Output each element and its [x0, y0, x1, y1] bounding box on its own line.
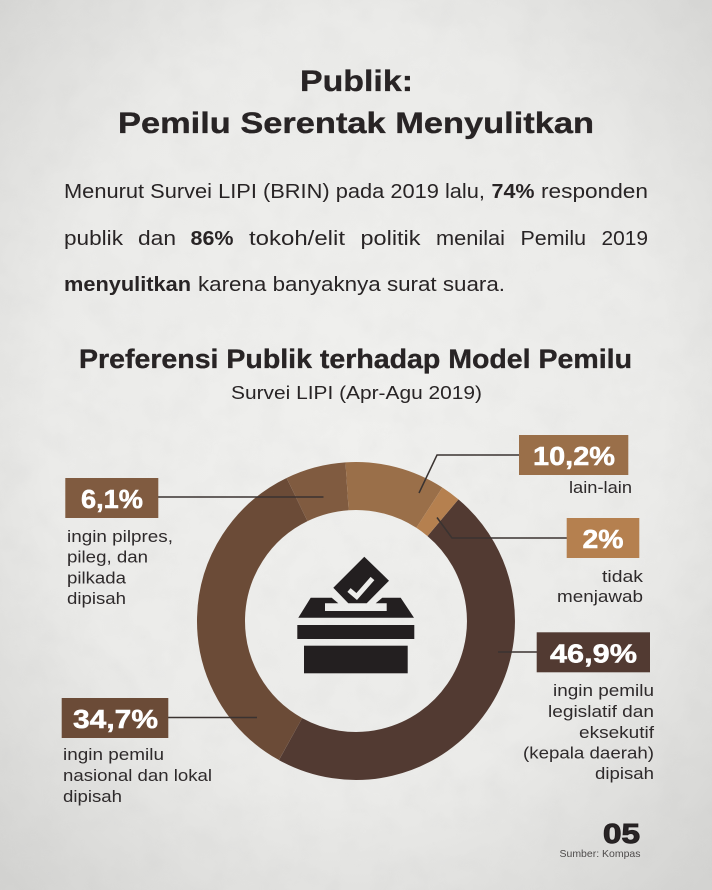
segment: 46,9% [291, 518, 491, 756]
callout: 6,1%: 6,1% [81, 484, 143, 514]
callout: 34,7%: dipisah [63, 788, 122, 806]
icon: ballot box [297, 557, 414, 673]
intro paragraph: politik [360, 228, 422, 250]
callout: 34,7%: nasional dan lokal [63, 767, 212, 785]
callout: 10,2% lain-lain: 10,2% [533, 441, 615, 471]
callout: 10,2% lain-lain: lain-lain [569, 479, 632, 497]
segment: 34,7% [221, 500, 297, 739]
title [118, 65, 594, 140]
callout: 46,9%: (kepala daerah) [523, 744, 654, 762]
callout: 46,9%: dipisah [595, 765, 654, 783]
title: Publik: [300, 65, 413, 98]
intro paragraph: Pemilu [520, 228, 586, 250]
intro paragraph: tokoh/elit [249, 228, 346, 250]
title: Pemilu Serentak Menyulitkan [118, 107, 594, 140]
callout: 2% tidak menjawab [437, 518, 644, 606]
callout: 10,2% lain-lain [419, 435, 632, 497]
callout: 46,9%: ingin pemilu [553, 682, 654, 700]
callout: 6,1%: pileg, dan [67, 548, 148, 566]
callout: 6,1%: pilkada [67, 570, 127, 588]
intro paragraph: 74% [492, 181, 535, 203]
segment: 10,2% [347, 486, 429, 508]
intro paragraph: publik [64, 228, 124, 250]
intro paragraph: menilai [436, 228, 505, 250]
callout: 46,9%: 46,9% [550, 638, 637, 668]
chart subheading: Survei LIPI (Apr-Agu 2019) [231, 382, 482, 403]
intro paragraph: 86% [190, 228, 234, 250]
callout: 6,1%: dipisah [67, 590, 126, 608]
callout: 34,7%: 34,7% [73, 704, 158, 734]
callout: 46,9% [498, 632, 654, 783]
intro paragraph: Menurut Survei LIPI (BRIN) pada 2019 lalu, [64, 181, 485, 203]
donut chart [221, 486, 491, 756]
page number: 05 [603, 818, 640, 849]
intro paragraph: 2019 [602, 228, 648, 250]
chart heading: Preferensi Publik terhadap Model Pemilu [79, 344, 632, 374]
intro paragraph: menyulitkan [64, 274, 191, 296]
callout: 2% tidak menjawab: 2% [582, 524, 624, 554]
callout: 46,9%: eksekutif [579, 724, 654, 742]
segment: 6,1% [297, 486, 347, 500]
intro paragraph: karena banyaknya surat suara. [198, 274, 505, 296]
intro paragraph: dan [138, 228, 176, 250]
callout: 46,9%: legislatif dan [548, 703, 654, 721]
callout: 34,7%: ingin pemilu [63, 746, 164, 764]
callout: 2% tidak menjawab: menjawab [557, 588, 643, 606]
intro paragraph [64, 181, 648, 296]
callout: 2% tidak menjawab: tidak [602, 568, 644, 586]
callout: 6,1% [65, 478, 324, 608]
source: Sumber: Kompas [560, 848, 640, 860]
callout: 6,1%: ingin pilpres, [67, 528, 173, 546]
callout: 34,7% [62, 698, 257, 806]
intro paragraph: responden [541, 181, 648, 203]
segment: 2% [429, 508, 443, 518]
